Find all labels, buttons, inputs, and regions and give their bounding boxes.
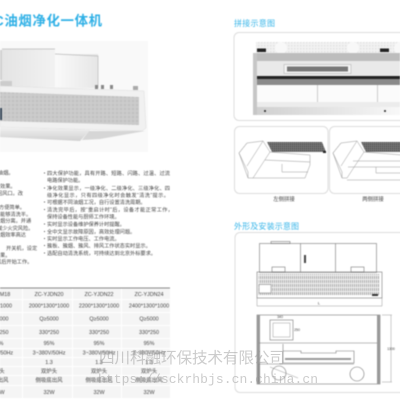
- specification table: 330*250: [39, 330, 59, 336]
- front elevation: [257, 242, 382, 306]
- feature bullet list: 簇板、簇烟、簇风、排风工作状态实时显示。: [47, 242, 151, 250]
- panel: splicing photo: [234, 32, 400, 120]
- specification table: 3~380V/50Hz: [33, 350, 66, 356]
- specification table: 95%: [94, 341, 105, 347]
- plan view: 250: [294, 328, 300, 332]
- specification table: 3~380V/50Hz: [83, 350, 116, 356]
- specification table: 95%: [144, 341, 155, 347]
- left feature text column: 烟效率高达: [0, 230, 26, 238]
- specification table: 2200*1300*1000: [79, 304, 119, 310]
- specification table: 1.3: [45, 360, 53, 366]
- feature bullet list: 清洗完毕后，按“重启计时”后，设备才能正常工作，: [47, 206, 173, 214]
- specification table: [0, 288, 170, 398]
- feature bullet list: 实时显示设备维护保养计时提醒。: [47, 220, 125, 228]
- specification table: 1.3: [145, 360, 153, 366]
- panel: both-side splice drawing: [330, 126, 400, 194]
- caption: left-side splice: 左侧拼接: [273, 195, 295, 203]
- panel: outline and installation diagram: [235, 232, 400, 392]
- specification table: Q≥5000: [39, 316, 59, 322]
- feature bullet list: 实时显示工作电压、工作电流。: [47, 234, 120, 242]
- specification table: 330*250: [139, 330, 159, 336]
- left feature text column: 能够清洗半。: [0, 210, 31, 218]
- specification table: Q≥5000: [89, 316, 109, 322]
- left feature text column: 烟分离。并通: [0, 216, 32, 224]
- specification table: 32W: [43, 390, 55, 396]
- specification table: 双炉头: [41, 367, 58, 375]
- specification table: 1.3: [95, 360, 103, 366]
- specification table: 3~380V/50Hz: [133, 350, 166, 356]
- specification table: 32W: [143, 390, 155, 396]
- specification table: ZC-YJDN22: [84, 292, 114, 298]
- panel: left-side splice drawing: [234, 126, 328, 194]
- feature bullet list: 保持设备性能与厨师工作环境。: [47, 212, 120, 220]
- watermark: company name: 四川科融环保技术有限公司: [99, 349, 285, 367]
- watermark: url: https://sckrhbjs.cn.china.cn: [98, 372, 318, 387]
- feature bullet list: 级净化显示，只有四级净化时会触发“清洗”提示。: [47, 191, 169, 199]
- specification table: ZC-YJDN24: [134, 292, 164, 298]
- feature bullet list: 可根据不同油烟工况，自行设置清洗周期。: [47, 198, 146, 206]
- specification table: M18: [0, 292, 10, 298]
- specification table: 95%: [44, 341, 55, 347]
- heading: outline and installation diagram: 外形及安装示意图: [234, 221, 299, 231]
- plan view: 340: [277, 315, 283, 319]
- specification table: 330*250: [89, 330, 109, 336]
- feature bullet list: 净化效果显示，一级净化、二级净化、三级净化、四: [47, 184, 170, 192]
- specification table: 侧吸底出风: [136, 376, 163, 384]
- front elevation: L: [318, 300, 321, 306]
- specification table: Q≥5000: [139, 316, 159, 322]
- plan view: 1300: [387, 347, 395, 351]
- feature bullet list: 电路保护功能。: [47, 176, 83, 184]
- product photo: [0, 41, 148, 152]
- feature bullet list: 选配自动清洗系统，可持续达到北京外标要求。: [47, 249, 156, 257]
- specification table: 侧吸底出风: [36, 376, 63, 384]
- specification table: 2400*1300*1000: [129, 304, 169, 310]
- specification table: ZC-YJDN20: [34, 292, 64, 298]
- caption: both-side splice: 两侧拼接: [362, 195, 384, 203]
- left feature text column: [0, 168, 37, 266]
- plan view: [257, 315, 395, 384]
- heading: splicing diagram: 拼接示意图: [234, 18, 275, 28]
- specification table: 32W: [93, 390, 105, 396]
- specification table: 双炉头: [141, 367, 158, 375]
- feature bullet list: [44, 169, 173, 257]
- feature bullet list: 四大保护功能，具有开路、短路、闪路、过温、过流: [47, 169, 170, 177]
- specification table: 侧吸底出风: [86, 376, 113, 384]
- left feature text column: 果。: [0, 252, 10, 259]
- specification table: 2000*1300*1000: [29, 304, 69, 310]
- left feature text column: 开关机，设定: [6, 244, 37, 252]
- specification table: 双炉头: [91, 367, 108, 375]
- left feature text column: 效果。: [0, 182, 16, 190]
- feature bullet list: 全中文显示故障原因，高效处理问题。: [47, 228, 135, 236]
